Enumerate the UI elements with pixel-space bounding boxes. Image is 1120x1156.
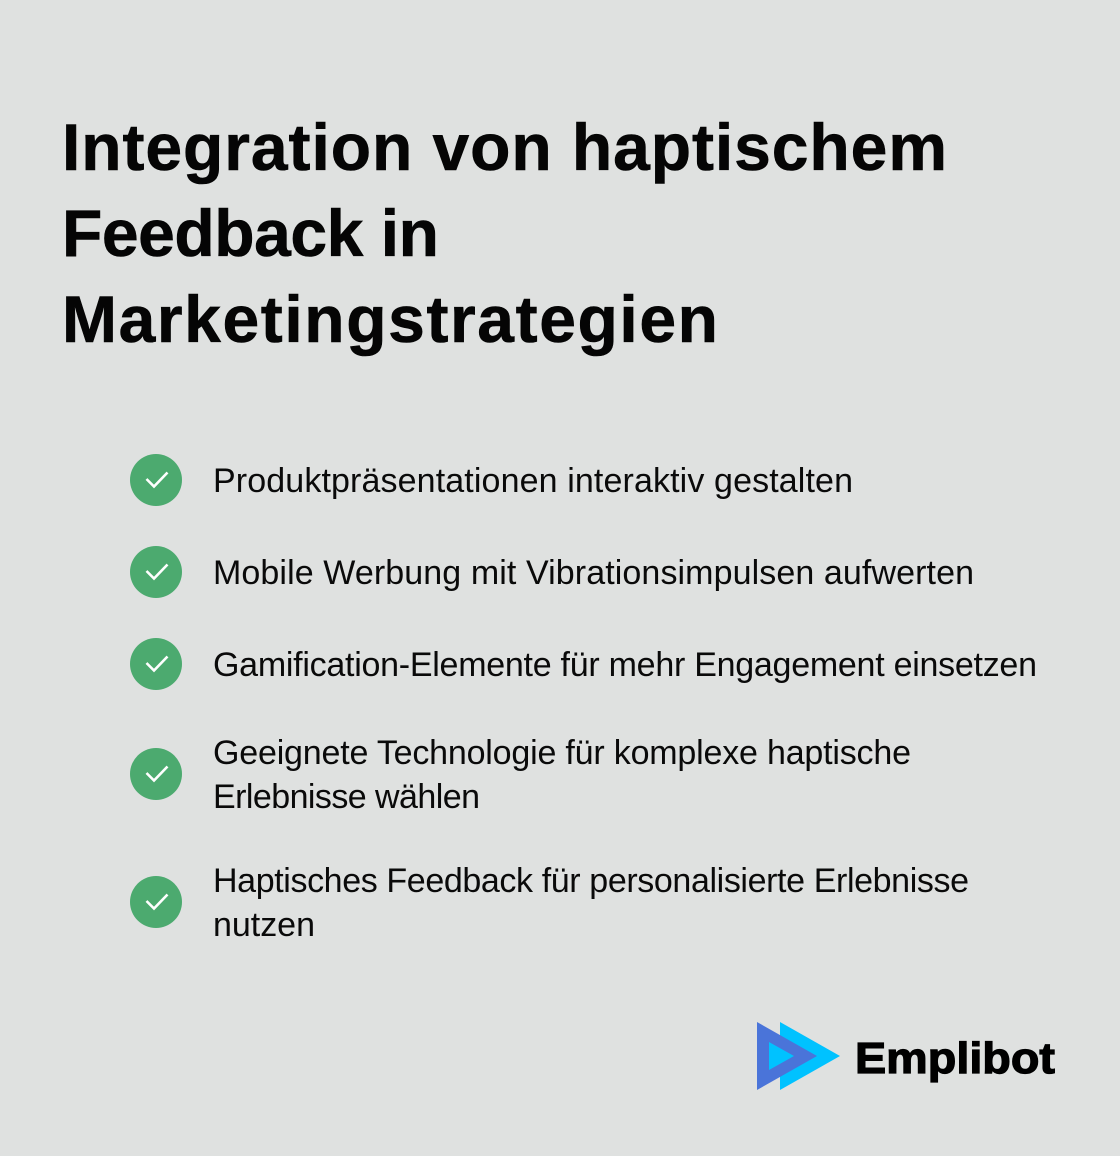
item: Mobile Werbung: Mobile Werbung mit Vibrationsimpulsen aufwerten	[213, 554, 974, 592]
logo: Emplibot	[757, 1022, 1055, 1090]
item: Haptisches Feedback	[130, 862, 969, 944]
title	[62, 110, 947, 356]
title: Integration von haptischem	[62, 110, 947, 184]
item: Mobile Werbung	[130, 546, 974, 598]
item: Haptisches Feedback: Haptisches Feedback für personalisierte Erlebnisse	[213, 862, 969, 900]
item: Gamification: Gamification-Elemente für mehr Engagement einsetzen	[213, 646, 1037, 684]
icon: play triangles	[757, 1022, 840, 1090]
checklist	[130, 454, 1037, 944]
item: Geeignete Technologie: Geeignete Technologie für komplexe haptische	[213, 734, 911, 772]
title: Marketingstrategien	[62, 282, 718, 356]
item: Gamification	[130, 638, 1037, 690]
item: Haptisches Feedback: nutzen	[213, 906, 315, 944]
item: Produktpräsentationen: Produktpräsentationen interaktiv gestalten	[213, 462, 853, 500]
wordmark: Emplibot	[855, 1034, 1055, 1083]
title: Feedback in	[62, 196, 439, 270]
item: Geeignete Technologie: Erlebnisse wählen	[213, 778, 480, 816]
item: Geeignete Technologie	[130, 734, 911, 816]
item: Produktpräsentationen	[130, 454, 853, 506]
